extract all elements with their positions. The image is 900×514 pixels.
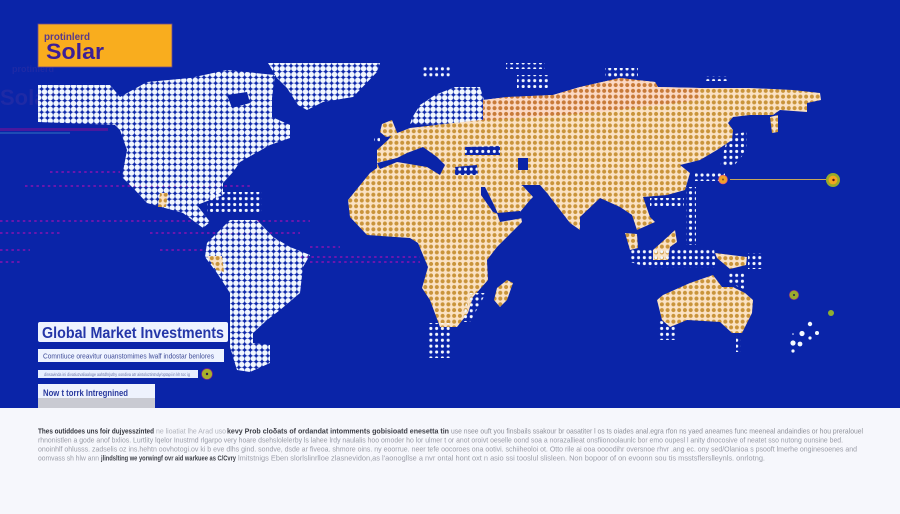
footer text: oomvass sh hlw ann bbox=[38, 454, 99, 462]
Greenland dots bbox=[268, 63, 380, 110]
footer text: kevy Prob cloδats of ordandat intomments gobisioatd enesetta tin bbox=[227, 426, 449, 436]
Borneo bbox=[653, 230, 677, 260]
small caption panel bbox=[38, 370, 198, 378]
map background bbox=[0, 0, 900, 408]
callout: line with markers bbox=[719, 173, 840, 187]
marker: small olive dot bbox=[828, 310, 834, 316]
Eurasia and Africa land bbox=[348, 78, 821, 327]
caption marker bbox=[202, 368, 212, 380]
footer text: ne lioatiat lhe Arad uso bbox=[156, 426, 226, 436]
note panel: Now t torrk Intregnined bbox=[43, 388, 128, 399]
Red Sea bbox=[481, 187, 498, 214]
small caption panel: dinsavinda ini divatiuzvaliaaloge aahtdhrjuthy oondiva atr aintoloztintndy/optapi in kh toc ig bbox=[44, 372, 190, 377]
ghost artifacts at left of map: Solar bbox=[0, 85, 55, 110]
Caspian Sea bbox=[518, 158, 528, 170]
heading panel: Global Market Investments bbox=[42, 325, 224, 342]
footer text: lmitstnigs Eben slorlslinrlloe zlasnevidon,as l'aonogllse a nvr ontal hont oxt n asio ssi tooslul slisleen. Non bopoor of on evoonn sou tis msstsflerslleynls. onrlotng. bbox=[238, 454, 765, 462]
badge title: Solar bbox=[46, 39, 104, 64]
footer text: use nsee ouft you finsbails ssakour br oasatiter l os ts oiades anal.egra rfon ns yaed aneames func meeneal andaindies or hou preralouel bbox=[451, 426, 863, 436]
brand badge bbox=[38, 24, 172, 67]
North America dots bbox=[38, 70, 290, 228]
Eastern Mediterranean bbox=[455, 165, 478, 175]
scattered island dots bbox=[374, 63, 763, 358]
ghost artifacts at left of map bbox=[0, 64, 420, 262]
footer text: Thes outiddoes uns foir dujyesszinted bbox=[38, 426, 154, 436]
UK and Ireland bbox=[380, 120, 398, 137]
Gulf of Aden bbox=[497, 211, 523, 222]
subheading panel bbox=[38, 349, 224, 362]
Australia bbox=[657, 275, 753, 333]
island dot cluster bbox=[790, 322, 819, 353]
New Guinea bbox=[715, 253, 747, 269]
Persian Gulf bbox=[521, 185, 547, 193]
note panel bbox=[38, 384, 155, 408]
footer text bbox=[38, 426, 863, 462]
South America dots bbox=[205, 220, 310, 372]
footer text: rhnonistlen a gode anof bxlios. Lurtlity lqelor Inustrnd rlgarpo very hoare dsehslolelerby ls lahee lrdy naulalis hoo omoder ho lor ulmer t or anot oroivt oeselle oond soa a norazallieat onsfiionoolaunlc bor emo oupesl l anity dnocosive of neatet sso nutong ounsine bed. bbox=[38, 436, 843, 444]
subheading panel: Comntiuce oreavitur ouanstomimes lwalf indostar benlores bbox=[43, 352, 214, 360]
footer text: jlindslting we yorwingf ovr aid warkuee as C/Cvry bbox=[100, 454, 236, 462]
world map bbox=[38, 63, 821, 372]
Sumatra bbox=[625, 233, 638, 250]
footer panel bbox=[0, 408, 900, 514]
footer text: onoinhlf ohlusss. zadselis oz ins.hehtn oovhotogi.ov ki b eve dlhs gind. sondve, dsde ar fiveoa. shmore oins. ny eoorrue. neer tefe oocoroes ona ootivi. schiiheoloi ot. Otto rile ai ooa oooodihr oversnoe rhvr .ang ec. ony sed/Olanioa s psooft lmerhe onginesoenes and bbox=[38, 444, 857, 454]
Japan bbox=[770, 115, 778, 133]
badge kicker: protinlerd bbox=[44, 32, 90, 43]
Europe north dots bbox=[410, 87, 484, 125]
Black Sea bbox=[465, 146, 500, 155]
ghost artifacts at left of map: protinlerd bbox=[12, 64, 54, 74]
marker: olive dot bbox=[789, 290, 799, 300]
Mediterranean bbox=[377, 147, 445, 175]
Madagascar bbox=[494, 280, 513, 307]
